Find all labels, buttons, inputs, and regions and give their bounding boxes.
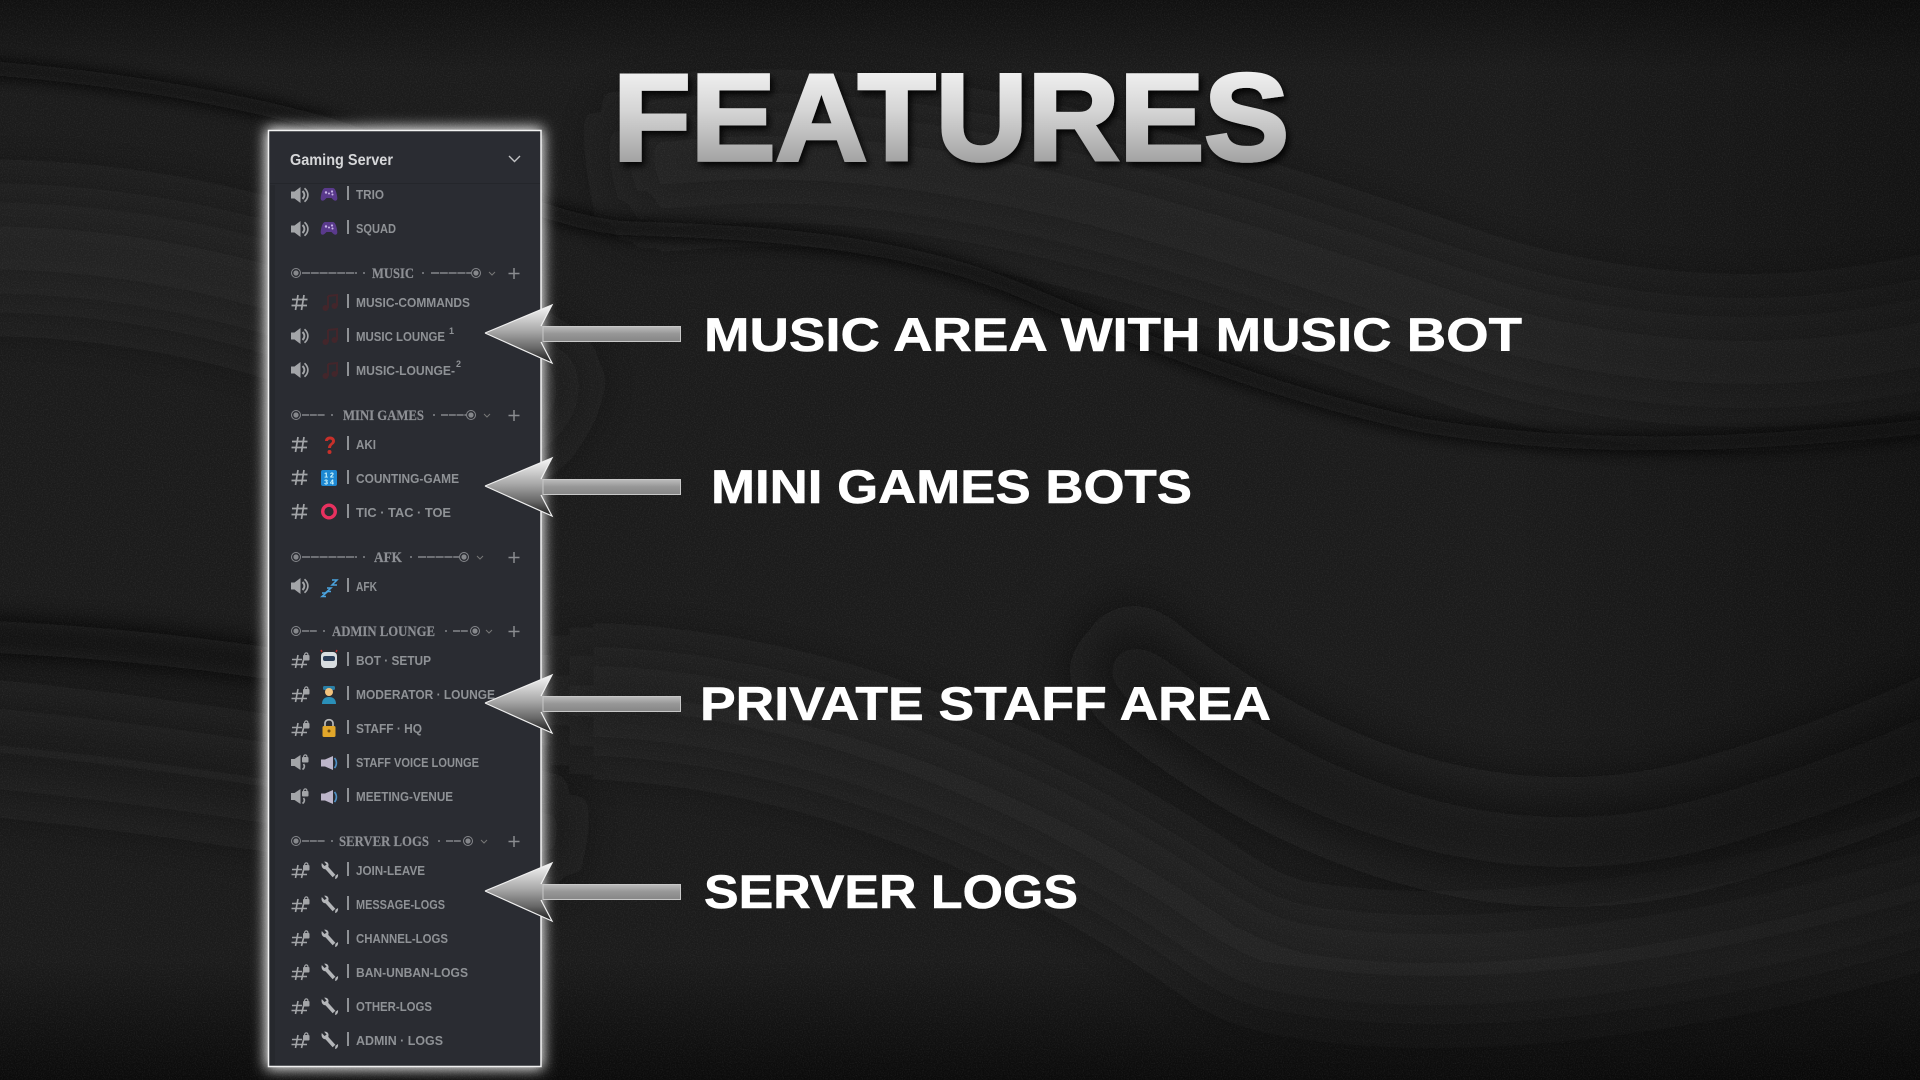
channel: other-logs xyxy=(292,998,432,1015)
title: FEATURES xyxy=(613,50,1289,187)
category: afk: AFK xyxy=(374,550,403,566)
label: server logs: SERVER LOGS xyxy=(704,865,1078,918)
channel: message-logs xyxy=(292,896,445,913)
channel: staff hq: STAFF · HQ xyxy=(356,722,422,736)
category: admin lounge: ADMIN LOUNGE xyxy=(332,624,435,640)
channel: join-leave xyxy=(292,862,425,879)
channel: music-commands xyxy=(292,294,470,311)
channel: music lounge 1: 1 xyxy=(449,326,454,336)
channel: music lounge 1: MUSIC LOUNGE xyxy=(356,330,445,344)
category: mini games xyxy=(292,408,520,424)
channel: music lounge 2: 2 xyxy=(456,359,461,369)
panel: discord channel list xyxy=(266,128,543,1069)
channel: other-logs: OTHER-LOGS xyxy=(356,1000,432,1014)
channel: moderator lounge: MODERATOR · LOUNGE xyxy=(356,688,495,702)
channel: bot setup xyxy=(292,650,431,668)
channel: aki xyxy=(292,436,376,454)
category: server logs xyxy=(292,834,520,850)
channel: meeting-venue: MEETING-VENUE xyxy=(356,790,453,804)
arrow: server logs xyxy=(485,863,681,921)
channel: staff hq xyxy=(292,720,422,737)
server name header xyxy=(290,152,520,169)
category: afk xyxy=(292,550,520,566)
channel: channel-logs xyxy=(292,930,448,947)
channel: tic tac toe xyxy=(292,504,451,520)
arrow: music area xyxy=(485,305,681,363)
category: admin lounge xyxy=(292,624,520,640)
label: staff area: PRIVATE STAFF AREA xyxy=(700,677,1271,730)
channel: admin logs xyxy=(292,1032,443,1049)
category: music: MUSIC xyxy=(372,266,414,282)
channel: music lounge 1 xyxy=(291,326,454,345)
channel: staff voice lounge xyxy=(291,754,479,770)
channel: music lounge 2: MUSIC-LOUNGE- xyxy=(356,364,455,378)
channel: admin logs: ADMIN · LOGS xyxy=(356,1034,443,1048)
channel: channel-logs: CHANNEL-LOGS xyxy=(356,932,448,946)
channel: counting-game: 1 2 xyxy=(324,472,334,480)
channel: staff voice lounge: STAFF VOICE LOUNGE xyxy=(356,756,479,770)
label: music area: MUSIC AREA WITH MUSIC BOT xyxy=(704,308,1522,361)
arrow: mini games xyxy=(485,458,681,516)
channel: counting-game xyxy=(292,470,459,486)
channel: moderator lounge xyxy=(292,686,495,704)
channel: afk xyxy=(291,578,377,596)
channel: counting-game: 3 4 xyxy=(324,480,334,486)
channel: music lounge 2 xyxy=(291,359,461,379)
channel: music-commands: MUSIC-COMMANDS xyxy=(356,296,470,310)
server name header: Gaming Server xyxy=(290,152,393,169)
channel: message-logs: MESSAGE-LOGS xyxy=(356,898,445,912)
label: mini games: MINI GAMES BOTS xyxy=(711,460,1192,513)
category: server logs: SERVER LOGS xyxy=(339,834,429,850)
arrow: staff area xyxy=(485,675,681,733)
channel: squad xyxy=(291,220,396,237)
channel: meeting-venue xyxy=(291,788,453,804)
channel: trio xyxy=(291,186,384,203)
channel: join-leave: JOIN-LEAVE xyxy=(356,864,425,878)
channel: tic tac toe: TIC · TAC · TOE xyxy=(356,506,451,520)
category: mini games: MINI GAMES xyxy=(343,408,424,424)
channel: aki: AKI xyxy=(356,438,376,452)
channel: bot setup: BOT · SETUP xyxy=(356,654,431,668)
category: music xyxy=(292,266,520,282)
channel: trio: TRIO xyxy=(356,188,384,202)
channel: ban-unban-logs: BAN-UNBAN-LOGS xyxy=(356,966,468,980)
channel: squad: SQUAD xyxy=(356,222,396,236)
channel: afk: AFK xyxy=(356,580,377,594)
channel: counting-game: COUNTING-GAME xyxy=(356,472,459,486)
channel: ban-unban-logs xyxy=(292,964,468,981)
